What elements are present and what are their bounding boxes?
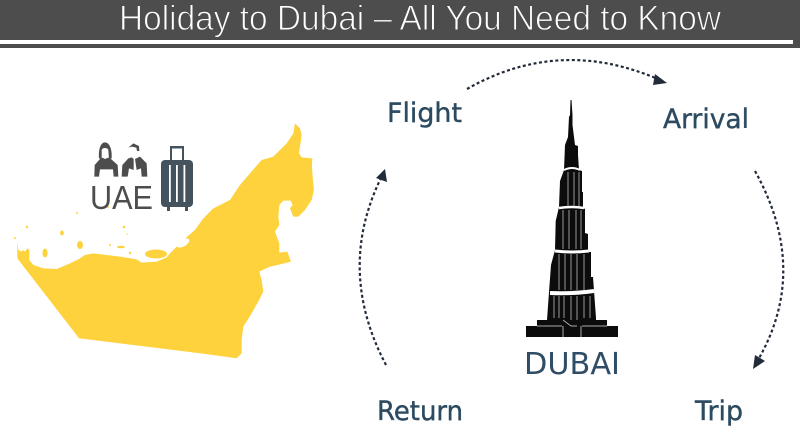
title banner: Holiday to Dubai – All You Need to Know [119, 0, 722, 38]
island group [14, 206, 167, 258]
title banner [0, 0, 800, 48]
arrow: flight to arrival [467, 60, 667, 89]
icon: suitcase [161, 146, 193, 211]
icon: man [122, 143, 147, 177]
Trip label: Trip [694, 396, 743, 427]
Arrival label: Arrival [663, 104, 749, 135]
DUBAI label: DUBAI [524, 347, 620, 382]
icon: woman [94, 142, 118, 177]
icon: Burj Khalifa tower [526, 100, 618, 337]
UAE label: UAE [90, 179, 153, 216]
arrow: arrival to trip [753, 171, 783, 369]
tower bands [537, 168, 607, 337]
map of UAE [14, 123, 314, 358]
Flight label: Flight [387, 98, 462, 129]
Return label: Return [377, 396, 463, 427]
arrow: return to flight [360, 169, 387, 365]
island: Khor lagoon ring [175, 236, 191, 250]
